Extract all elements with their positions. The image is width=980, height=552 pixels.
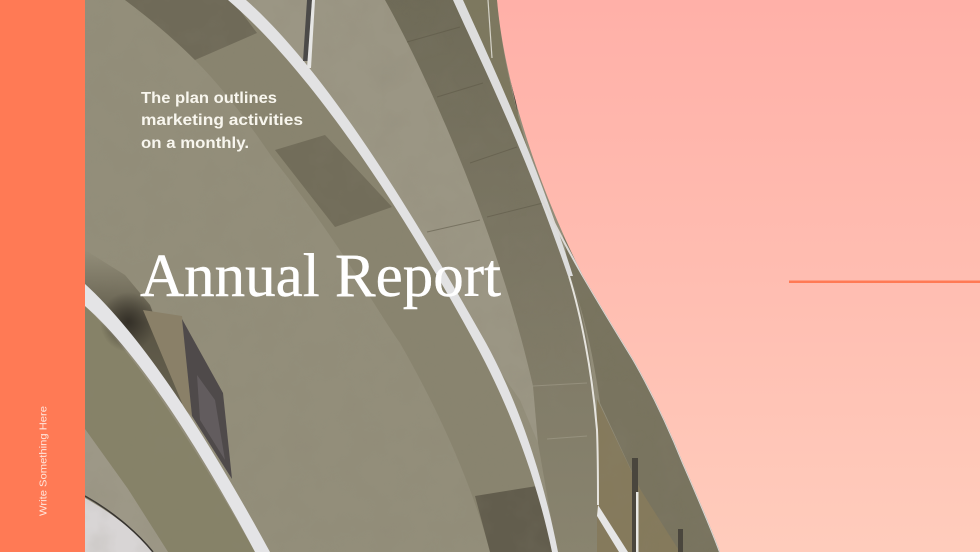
pole lower far right xyxy=(678,529,683,552)
brown soffit lower right xyxy=(597,399,680,552)
concrete beam lower left xyxy=(85,306,255,552)
dark window xyxy=(182,319,232,479)
intro text block: on a monthly. xyxy=(141,135,249,152)
white edge: second beam xyxy=(453,0,573,276)
intro text block: The plan outlines xyxy=(141,90,277,107)
dark beam segment top xyxy=(125,0,257,60)
third curved beam xyxy=(563,235,720,552)
concrete mottling xyxy=(88,498,107,552)
orange sidebar xyxy=(0,0,85,552)
pole top highlight xyxy=(307,0,315,68)
sidebar vertical caption: Write Something Here xyxy=(38,406,50,516)
window highlight xyxy=(197,375,225,460)
pole lower right xyxy=(632,458,638,552)
pale column beside shadow xyxy=(143,310,192,416)
second curved beam xyxy=(385,0,597,552)
lower right white brace xyxy=(597,505,628,552)
dark beam segment middle xyxy=(275,135,392,227)
intro text block xyxy=(141,90,303,152)
shadow under beam xyxy=(85,263,182,404)
pale panel bottom left xyxy=(85,498,152,552)
dark beam segment bottom xyxy=(475,486,556,552)
outer beam sliver xyxy=(463,0,528,149)
outer white edge along silhouette xyxy=(554,222,720,552)
white edge: lower left beam xyxy=(85,284,270,552)
orange accent line xyxy=(789,280,980,283)
white edge: main beam xyxy=(228,0,558,552)
architectural photo xyxy=(85,0,725,552)
concrete soffit base xyxy=(85,0,725,552)
thin white line xyxy=(569,276,598,505)
title: Annual Report xyxy=(140,243,501,310)
dark shadow at top right xyxy=(511,82,518,115)
soft soffit lower left xyxy=(85,429,168,552)
intro text block: marketing activities xyxy=(141,112,303,129)
seams on the beams xyxy=(407,27,543,232)
thin vertical highlight xyxy=(488,0,492,58)
main curved beam xyxy=(196,13,535,526)
light soffit between first and second beam xyxy=(240,0,538,443)
pole top xyxy=(303,0,312,61)
